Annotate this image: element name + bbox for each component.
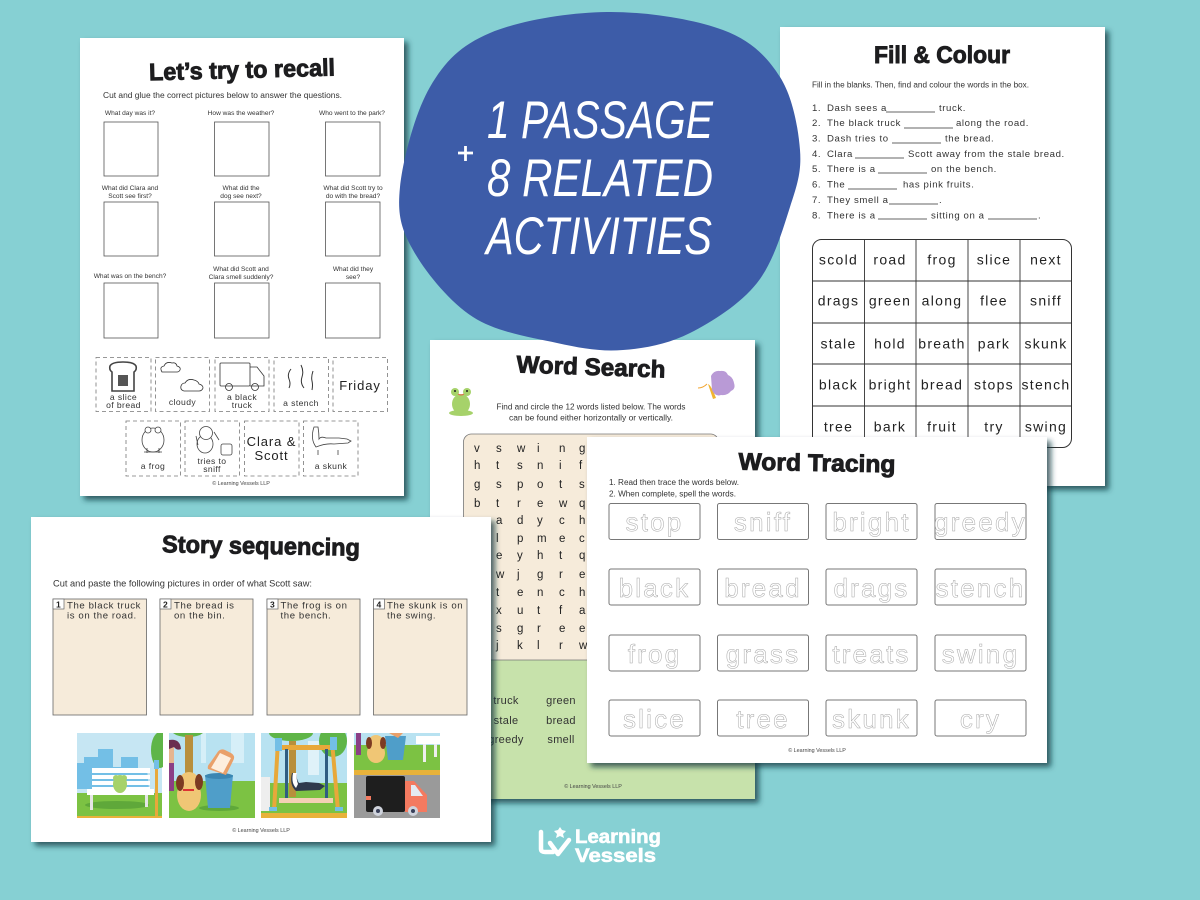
tracing boxes: grass — [726, 639, 800, 669]
word list: bread — [546, 715, 576, 727]
tracing boxes: slice — [623, 704, 686, 734]
fill in the blanks list: 4. — [812, 149, 821, 160]
cut-out cards: tries to — [198, 456, 226, 466]
question labels — [94, 110, 385, 281]
callout: blue blob headline — [399, 12, 800, 350]
cut-out cards: truck — [232, 400, 253, 410]
story boxes: the swing. — [387, 610, 436, 622]
fill in the blanks list: Clara — [827, 149, 853, 160]
tracing boxes: treats — [832, 639, 911, 669]
tracing boxes: sniff — [734, 507, 792, 537]
panel: word tracing worksheet — [587, 437, 1047, 763]
word grid: bright — [869, 376, 911, 392]
fill in the blanks list: 2. — [812, 118, 821, 129]
story boxes: The skunk is on — [387, 600, 463, 612]
word grid: black — [819, 376, 858, 392]
word grid: frog — [927, 252, 957, 268]
word search grid: vswing — [474, 443, 585, 455]
picture: frog on bench — [77, 732, 169, 818]
fill in the blanks list: The black truck — [827, 118, 901, 129]
fill in the blanks list: 6. — [812, 180, 821, 190]
word search grid: xutfa — [496, 605, 586, 617]
fill in the blanks list: 7. — [812, 195, 821, 206]
logo: learning vessels: Vessels — [575, 845, 656, 867]
word grid: scold — [819, 252, 858, 268]
icon: clouds — [161, 362, 203, 391]
word grid: green — [869, 292, 911, 308]
question labels: What day was it? — [105, 110, 155, 117]
tracing boxes: black — [619, 573, 690, 603]
fill in the blanks list: Scott away from the stale bread. — [908, 149, 1065, 160]
copyright: © Learning Vessels LLP — [232, 827, 290, 834]
word grid: slice — [977, 252, 1011, 268]
panel: story sequencing worksheet — [31, 517, 491, 842]
tracing boxes: greedy — [934, 507, 1027, 537]
fill in the blanks list: along the road. — [956, 118, 1029, 129]
fill in the blanks list — [812, 103, 1065, 222]
instructions line two: can be found either horizontally or vertically. — [509, 414, 673, 422]
fill in the blanks list: sitting on a — [931, 210, 985, 222]
word grid: park — [978, 336, 1010, 352]
word list: smell — [547, 734, 575, 746]
word list: truck — [493, 695, 519, 707]
fill in the blanks list: 5. — [812, 164, 821, 175]
instructions: Fill in the blanks. Then, find and colour the words in the box. — [812, 80, 1029, 90]
story boxes: on the bin. — [174, 610, 225, 622]
icon: truck — [220, 363, 264, 390]
story boxes: 1 — [56, 600, 61, 610]
word list: stale — [494, 715, 518, 727]
picture: dog at bin and truck on road — [354, 733, 440, 818]
picture: dog and bread on bin — [169, 733, 255, 818]
question labels: What did Clara and — [102, 185, 159, 192]
fill in the blanks list: . — [939, 195, 942, 206]
word grid: stench — [1021, 376, 1071, 392]
word grid: stops — [974, 376, 1014, 392]
instructions: 1. Read then trace the words below. — [609, 478, 739, 487]
question labels: What did the — [222, 185, 260, 192]
cut-out cards: sniff — [203, 464, 221, 474]
word search grid: jklrw — [495, 640, 588, 652]
fill in the blanks list: 8. — [812, 210, 821, 222]
word search grid: eyhtq — [496, 550, 585, 562]
story boxes: 4 — [376, 600, 382, 610]
panel: recall worksheet — [80, 38, 404, 496]
word search grid — [464, 434, 718, 660]
plus sign — [458, 146, 473, 161]
icon: frog — [449, 388, 473, 416]
green footer band — [430, 660, 755, 799]
word grid: flee — [980, 292, 1008, 308]
word grid: breath — [918, 336, 966, 352]
cut-out cards: a frog — [141, 461, 165, 471]
word search grid: wjgre — [495, 569, 585, 581]
question labels: do with the bread? — [326, 193, 380, 200]
heading: word tracing: Word Tracing — [738, 449, 896, 478]
story boxes: the bench. — [280, 610, 331, 622]
cut-out cards: Friday — [339, 378, 381, 393]
fill in the blanks list: 1. — [812, 103, 821, 114]
story boxes: 3 — [270, 600, 275, 610]
word grid — [812, 240, 1072, 448]
callout: blue blob headline: ACTIVITIES — [484, 207, 712, 266]
logo mark — [541, 827, 569, 854]
question labels: What was on the bench? — [94, 273, 167, 280]
word grid: next — [1030, 252, 1062, 268]
heading: story sequencing: Story sequencing — [162, 531, 360, 562]
word search grid: tench — [496, 587, 585, 599]
story boxes — [53, 599, 467, 715]
question labels: What did Scott try to — [323, 185, 383, 192]
word grid: tree — [824, 418, 853, 434]
word search grid: btrewq — [474, 498, 585, 510]
word search grid: lpmec — [496, 533, 585, 545]
fill in the blanks list: There is a — [827, 210, 876, 222]
word list — [488, 695, 576, 746]
heading: fill and colour: Fill & Colour — [874, 42, 1010, 69]
tracing boxes: tree — [736, 704, 790, 734]
question labels: What did they — [333, 266, 374, 273]
tracing boxes: bright — [832, 507, 911, 537]
cut-out cards: Clara & — [247, 434, 296, 449]
instructions: Find and circle the 12 words listed below. The words — [496, 402, 686, 412]
fill in the blanks list: Dash tries to — [827, 134, 889, 144]
story boxes: The black truck — [67, 600, 141, 612]
icon: dog sniffing bread — [196, 426, 232, 455]
story boxes: The bread is — [174, 600, 235, 612]
fill in the blanks list: The — [827, 180, 845, 190]
tracing boxes: frog — [628, 639, 681, 669]
instructions line two: 2. When complete, spell the words. — [609, 490, 736, 498]
fill in the blanks list: . — [1038, 210, 1041, 222]
cut-out cards: a slice — [110, 392, 137, 402]
word grid: sniff — [1030, 292, 1062, 308]
cut-out cards — [96, 358, 388, 476]
story boxes: is on the road. — [67, 610, 137, 622]
heading: word search: Word Search — [516, 351, 666, 384]
tracing boxes: cry — [960, 704, 1001, 734]
story boxes: 2 — [163, 600, 168, 610]
icon: butterfly — [698, 371, 735, 399]
answer boxes — [104, 122, 380, 338]
word grid: bark — [874, 418, 906, 434]
fill in the blanks list: They smell a — [827, 195, 889, 206]
copyright: © Learning Vessels LLP — [212, 480, 270, 487]
word grid: swing — [1025, 418, 1067, 434]
headline text: 1 PASSAGE — [487, 91, 713, 150]
word grid: try — [984, 418, 1004, 434]
word list: greedy — [488, 734, 524, 746]
question labels: see? — [346, 274, 360, 281]
word grid: stale — [820, 336, 857, 352]
instructions: Cut and glue the correct pictures below to answer the questions. — [103, 91, 342, 100]
story boxes: The frog is on — [280, 600, 348, 612]
cut-out cards: a stench — [283, 398, 319, 408]
icon: bread — [110, 362, 136, 391]
heading: let's try to recall: Let’s try to recall — [149, 55, 335, 86]
copyright: © Learning Vessels LLP — [788, 747, 846, 754]
panel: fill and colour worksheet — [780, 27, 1105, 486]
panel: word search worksheet — [430, 340, 755, 799]
tracing boxes — [609, 504, 1027, 736]
cut-out cards: a skunk — [315, 461, 348, 471]
word search grid: htsnif — [474, 460, 583, 472]
word grid: road — [873, 252, 907, 268]
tracing boxes: drags — [833, 573, 910, 603]
question labels: Who went to the park? — [319, 110, 385, 117]
word search grid: adych — [496, 515, 585, 527]
word grid: hold — [874, 336, 906, 352]
tracing boxes: swing — [942, 639, 1019, 669]
fill in the blanks list: the bread. — [945, 134, 994, 144]
question labels: Scott see first? — [108, 193, 152, 200]
fill in the blanks list: on the bench. — [931, 164, 997, 175]
word list: green — [546, 695, 576, 707]
question labels: What did Scott and — [213, 266, 269, 273]
word grid: skunk — [1024, 336, 1068, 352]
tracing boxes: stench — [936, 573, 1025, 603]
instructions: Cut and paste the following pictures in order of what Scott saw: — [53, 578, 312, 588]
tracing boxes: stop — [626, 507, 683, 537]
tracing boxes: skunk — [832, 704, 911, 734]
fill in the blanks list: truck. — [939, 103, 966, 114]
tracing boxes: bread — [724, 573, 802, 603]
icon: stench lines — [288, 365, 313, 390]
word grid: bread — [921, 376, 963, 392]
question labels: Clara smell suddenly? — [209, 274, 274, 281]
cut-out cards: cloudy — [169, 397, 196, 407]
cut-out cards: of bread — [106, 400, 141, 410]
word grid: drags — [818, 292, 859, 308]
copyright: © Learning Vessels LLP — [564, 783, 622, 790]
word search grid: sgree — [496, 623, 585, 635]
icon: skunk — [312, 427, 351, 455]
callout: blue blob headline: 8 RELATED — [487, 149, 713, 208]
word grid: fruit — [927, 418, 957, 434]
fill in the blanks list: Dash sees a — [827, 103, 887, 114]
word grid: along — [922, 292, 962, 308]
fill in the blanks list: 3. — [812, 134, 821, 144]
logo text: Learning — [575, 826, 661, 848]
question labels: How was the weather? — [208, 110, 275, 117]
cut-out cards: a black — [227, 392, 257, 402]
fill in the blanks list: has pink fruits. — [903, 180, 974, 190]
cut-out cards: Scott — [254, 448, 289, 463]
icon: frog — [142, 427, 164, 453]
word search grid: gspots — [474, 479, 585, 491]
picture: skunk on swing — [261, 725, 347, 818]
fill in the blanks list: There is a — [827, 164, 876, 175]
logo: learning vessels — [541, 826, 661, 867]
question labels: dog see next? — [220, 193, 262, 200]
